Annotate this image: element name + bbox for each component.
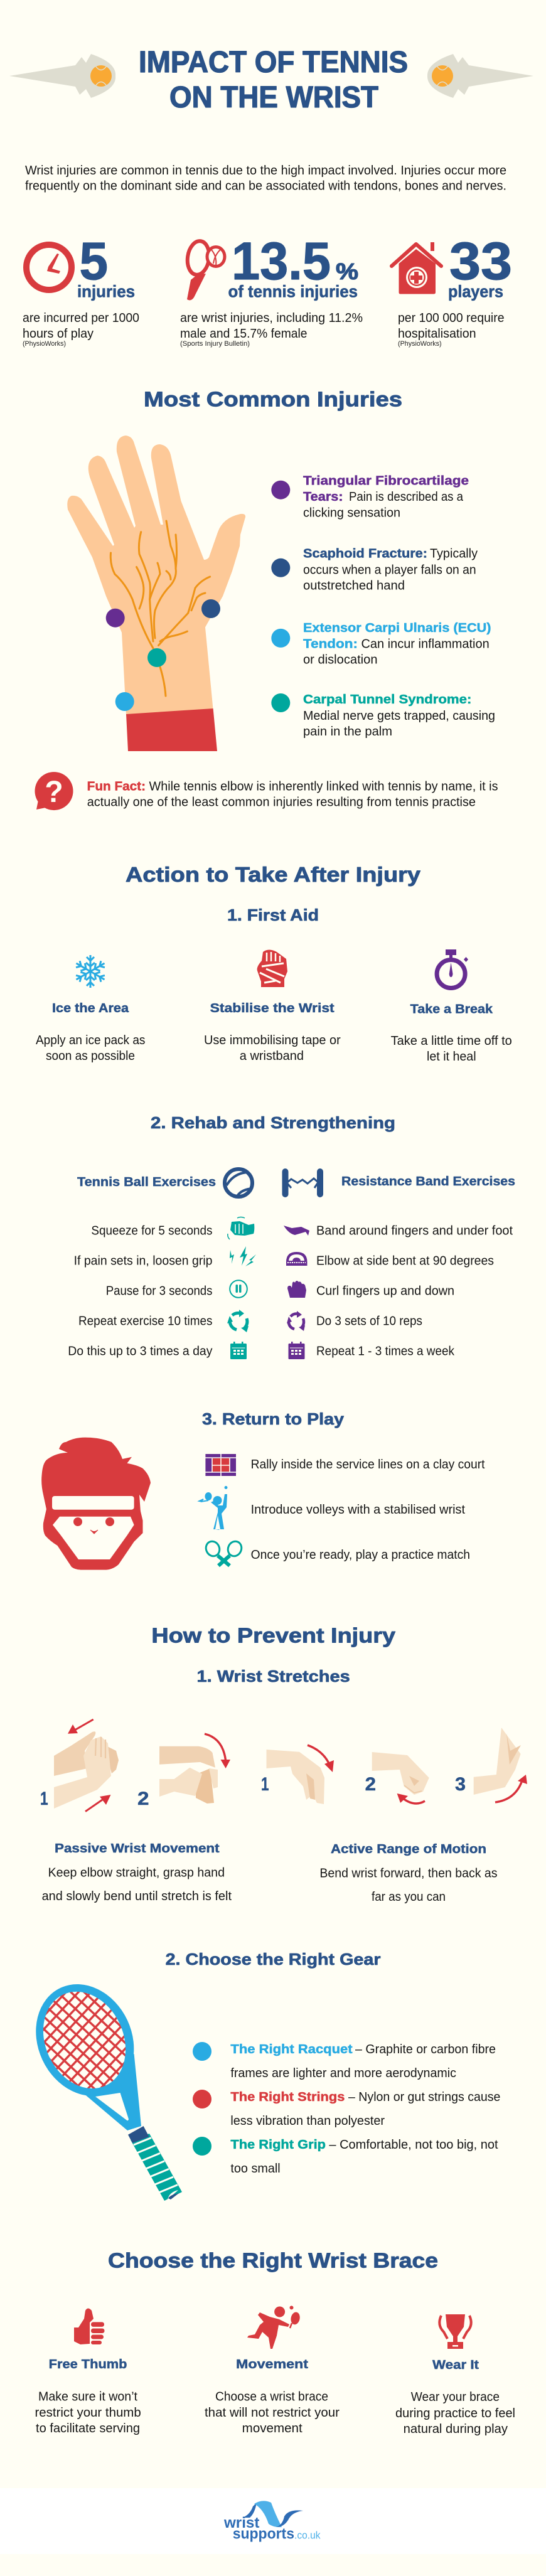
stat: 13.5% of tennis injuries: are wrist injuries, including 11.2% (180, 311, 363, 325)
icon: question bubble (35, 772, 73, 810)
subheading: Rehab and Strengthening: 2. Rehab and Strengthening (151, 1113, 395, 1132)
first aid: ice the area: soon as possible (46, 1049, 135, 1063)
legend: Triangular Fibrocartilage Tears (271, 474, 469, 520)
header row (282, 1168, 515, 1197)
number 3: 3 (455, 1774, 466, 1795)
legend: ECU Tendon: or dislocation (303, 653, 378, 666)
icon: serving player (200, 1486, 227, 1530)
stat: 5 injuries (23, 232, 139, 348)
first aid: take a break: Take a little time off to (391, 1034, 512, 1048)
gear item: racquet: – Graphite or carbon fibre (355, 2043, 496, 2056)
title: IMPACT OF TENNIS (139, 46, 408, 79)
stat: 33 players: hospitalisation (398, 327, 476, 341)
exercise row 5 (289, 1342, 455, 1359)
footer logo: wrist supports (223, 2501, 321, 2543)
subheading: Wrist Stretches: 1. Wrist Stretches (197, 1667, 350, 1686)
callout: fun fact (35, 772, 498, 810)
panel: key statistics (23, 232, 512, 348)
gear item: strings: less vibration than polyester (230, 2114, 385, 2128)
stat: 5 injuries: injuries (77, 282, 135, 301)
step 2 hands (159, 1746, 218, 1804)
heading: Choose the Right Wrist Brace: Choose the Right Wrist Brace (108, 2249, 438, 2272)
stat: 5 injuries: 5 (79, 232, 108, 291)
icon: lightning bolts (230, 1246, 256, 1266)
legend: ECU Tendon: Tendon: (303, 638, 358, 651)
text: Active Range of Motion: far as you can (372, 1890, 446, 1904)
callout: fun fact: Fun Fact: (87, 780, 146, 794)
nerves (110, 521, 210, 696)
brace tip: free thumb: Make sure it won’t (38, 2390, 137, 2403)
first aid: ice the area: Apply an ice pack as (36, 1034, 145, 1047)
icon: foot and band (284, 1226, 309, 1236)
exercise row 1 (91, 1217, 254, 1239)
footer logo: wrist supports: supports (233, 2526, 294, 2543)
brace tip: movement: Movement (236, 2358, 308, 2371)
subheading: First Aid: 1. First Aid (227, 906, 319, 924)
brace tip: movement: that will not restrict your (205, 2406, 340, 2420)
gear item: grip: – Comfortable, not too big, not (329, 2138, 498, 2152)
text: Passive Wrist Movement: Keep elbow straight, grasp hand (48, 1866, 225, 1880)
icon: stopwatch (437, 949, 468, 988)
icon: thumbs up (74, 2308, 104, 2344)
icon: squeezing fist (228, 1217, 254, 1239)
first aid: stabilise the wrist: Use immobilising tape or (204, 1034, 341, 1047)
icon: tennis ball (225, 1169, 252, 1197)
legend: Carpal Tunnel Syndrome: Carpal Tunnel Syndrome: (303, 693, 471, 707)
exercise row 4 (78, 1310, 249, 1332)
gear item: racquet (193, 2042, 496, 2080)
text: Passive Wrist Movement: Passive Wrist Movement (55, 1842, 220, 1856)
legend: ECU Tendon: Can incur inflammation (361, 638, 490, 651)
exercise row 3 (106, 1280, 247, 1298)
grip (128, 2126, 182, 2201)
injury marker: blue (115, 692, 134, 711)
header row: Tennis Ball Exercises (77, 1175, 216, 1189)
illustration: passive wrist movement (40, 1719, 230, 1812)
legend: Scaphoid Fracture: Typically (430, 547, 478, 561)
first aid: stabilise the wrist (204, 950, 341, 1063)
hand (67, 436, 245, 715)
first aid: take a break: let it heal (427, 1050, 476, 1064)
legend: Carpal Tunnel Syndrome (271, 693, 495, 739)
legend: Carpal Tunnel Syndrome: pain in the palm (303, 725, 392, 739)
brace tip: free thumb: Free Thumb (49, 2358, 127, 2371)
stat: 13.5% of tennis injuries: male and 15.7% female (180, 327, 308, 341)
item: volleys: Introduce volleys with a stabilised wrist (251, 1503, 465, 1517)
illustration: racket (18, 1968, 182, 2201)
panel: tennis ball exercises (68, 1169, 256, 1359)
stat: 5 injuries: (PhysioWorks) (23, 340, 66, 348)
icon: hand (287, 1281, 306, 1298)
icon: snowflake (74, 955, 107, 988)
text: Active Range of Motion: Active Range of Motion (331, 1842, 486, 1856)
title: ON THE WRIST (169, 81, 378, 114)
arrow (205, 1734, 230, 1768)
brace tip: wear it: Wear It (432, 2358, 479, 2372)
first aid: ice the area: Ice the Area (52, 1002, 129, 1015)
stat: 13.5% of tennis injuries: (Sports Injury Bulletin) (180, 340, 250, 348)
exercise row 5 (68, 1342, 247, 1359)
brace tip: movement (205, 2306, 340, 2435)
exercise row 5: Do this up to 3 times a day (68, 1345, 212, 1359)
first aid: stabilise the wrist: a wristband (240, 1049, 304, 1063)
gear item: grip (193, 2137, 498, 2176)
stat: 13.5% of tennis injuries: % (336, 259, 358, 284)
header: title and comets (9, 46, 533, 114)
first aid: stabilise the wrist: Stabilise the Wrist (210, 1002, 335, 1015)
brace tip: wear it: natural during play (404, 2422, 508, 2436)
number 1: 1 (40, 1788, 48, 1809)
first aid: take a break: Take a Break (410, 1003, 493, 1017)
icon: hospital house (392, 242, 441, 294)
step 2 hand (372, 1752, 429, 1795)
gear item: strings: The Right Strings (230, 2090, 345, 2104)
intro text (25, 164, 506, 193)
icon: clock (26, 245, 72, 290)
heading: Action to Take After Injury: Action to Take After Injury (126, 863, 421, 886)
gear item: racquet: frames are lighter and more aerodynamic (230, 2066, 456, 2080)
first aid: take a break (391, 949, 512, 1064)
text: Passive Wrist Movement: and slowly bend until stretch is felt (42, 1889, 232, 1903)
exercise row 4: Do 3 sets of 10 reps (316, 1315, 422, 1328)
header row (77, 1169, 252, 1197)
exercise row 4: Repeat exercise 10 times (78, 1315, 212, 1328)
sleeve (126, 708, 217, 751)
injury marker: navy (201, 599, 220, 618)
legend: Scaphoid Fracture: occurs when a player falls on an (303, 564, 476, 577)
exercise row 2 (74, 1246, 256, 1268)
item: volleys (200, 1486, 465, 1530)
subheading: Choose the Right Gear: 2. Choose the Right Gear (166, 1950, 380, 1969)
icon: question bubble: ? (45, 776, 63, 809)
callout: fun fact: actually one of the least common injuries resulting from tennis practise (87, 796, 476, 810)
legend: Carpal Tunnel Syndrome: Medial nerve gets trapped, causing (303, 709, 495, 723)
number 2: 2 (137, 1788, 149, 1809)
brace tip: free thumb: restrict your thumb (35, 2406, 141, 2420)
header row: Resistance Band Exercises (341, 1175, 515, 1189)
icon: calendar (289, 1342, 305, 1359)
legend: Triangular Fibrocartilage Tears: Pain is described as a (349, 490, 464, 504)
arrow (495, 1775, 527, 1802)
text: Passive Wrist Movement (42, 1842, 232, 1903)
icon: racket and ball (185, 240, 225, 300)
gear item: racquet: The Right Racquet (230, 2043, 353, 2056)
legend: Triangular Fibrocartilage Tears: Tears: (303, 490, 343, 504)
arrow (85, 1795, 110, 1812)
icon: tennis player (247, 2306, 301, 2349)
icon: pause (230, 1280, 247, 1298)
stat: 13.5% of tennis injuries: 13.5 (232, 232, 331, 291)
gear item: strings (193, 2090, 500, 2128)
panel: resistance band exercises (282, 1168, 515, 1359)
exercise row 4 (287, 1311, 422, 1331)
intro text: Wrist injuries are common in tennis due to the high impact involved. Injuries occur more (25, 164, 506, 178)
number 2: 2 (365, 1774, 376, 1795)
item: practice match (203, 1539, 470, 1566)
subheading: Return to Play: 3. Return to Play (202, 1409, 345, 1428)
legend: ECU Tendon (271, 621, 491, 666)
callout: fun fact: While tennis elbow is inherently linked with tennis by name, it is (149, 780, 498, 794)
panel: hand diagram (67, 436, 245, 751)
legend: Scaphoid Fracture: Scaphoid Fracture: (303, 547, 427, 561)
arrow (68, 1719, 94, 1734)
gear item: grip: The Right Grip (230, 2138, 326, 2152)
step 1 hands (54, 1731, 119, 1809)
heading: Most Common Injuries: Most Common Injuries (144, 388, 402, 411)
frame (18, 1968, 152, 2112)
exercise row 3: Pause for 3 seconds (106, 1285, 212, 1298)
item: rally: Rally inside the service lines on a clay court (251, 1458, 485, 1472)
footer logo: wrist supports: .co.uk (294, 2530, 321, 2541)
icon: repeat arrows (287, 1311, 305, 1331)
stat: 13.5% of tennis injuries (180, 232, 363, 348)
intro text: frequently on the dominant side and can be associated with tendons, bones and nerves. (25, 179, 506, 193)
brace tip: movement: Choose a wrist brace (215, 2390, 328, 2403)
icon: calendar (230, 1342, 247, 1359)
item: rally (205, 1454, 485, 1476)
exercise row 2: If pain sets in, loosen grip (74, 1254, 212, 1268)
exercise row 5: Repeat 1 - 3 times a week (316, 1345, 455, 1359)
stat: 5 injuries: are incurred per 1000 (23, 311, 139, 325)
exercise row 3 (287, 1281, 454, 1298)
legend: Scaphoid Fracture (271, 547, 478, 593)
icon: repeat arrows (227, 1310, 249, 1332)
step 1 hand (266, 1750, 324, 1804)
text: Active Range of Motion (319, 1842, 497, 1904)
icon: crossed rackets (203, 1539, 244, 1566)
exercise row 1: Band around fingers and under foot (316, 1224, 513, 1238)
brace tip: free thumb: to facilitate serving (36, 2422, 140, 2435)
legend: ECU Tendon: Extensor Carpi Ulnaris (ECU) (303, 621, 491, 635)
gear item: grip: too small (230, 2162, 281, 2176)
icon: player head with headband (41, 1438, 151, 1570)
footer logo: wrist supports: wrist (223, 2515, 259, 2531)
stat: 13.5% of tennis injuries: of tennis injuries (228, 282, 358, 301)
brace tip: wear it (395, 2314, 515, 2436)
stat: 5 injuries: hours of play (23, 327, 94, 341)
stat: 33 players: (PhysioWorks) (398, 340, 442, 348)
icon: right tennis ball comet (427, 54, 533, 98)
number 1: 1 (261, 1774, 269, 1795)
brace tip: wear it: Wear your brace (411, 2390, 500, 2404)
text: Active Range of Motion: Bend wrist forward, then back as (319, 1867, 497, 1881)
icon: bandaged hand (257, 950, 287, 987)
stat: 33 players (392, 232, 512, 348)
brace tip: wear it: during practice to feel (395, 2407, 515, 2420)
legend: Triangular Fibrocartilage Tears: clicking sensation (303, 506, 400, 520)
stat: 33 players: 33 (449, 232, 512, 291)
exercise row 3: Curl fingers up and down (316, 1285, 454, 1298)
stat: 33 players: players (448, 282, 503, 301)
illustration: active range of motion (261, 1728, 527, 1804)
throat (63, 2054, 141, 2130)
first aid: ice the area (36, 955, 145, 1063)
legend: Triangular Fibrocartilage Tears: Triangular Fibrocartilage (303, 474, 469, 488)
icon: left tennis ball comet (9, 54, 115, 98)
step 3 hand (474, 1728, 521, 1795)
brace tip: free thumb (35, 2308, 141, 2435)
arrow (308, 1745, 334, 1772)
gear item: strings: – Nylon or gut strings cause (348, 2090, 500, 2104)
icon: protractor (286, 1252, 308, 1266)
swoosh (242, 2501, 303, 2527)
icon: court (205, 1454, 236, 1476)
stat: 33 players: per 100 000 require (398, 311, 505, 325)
brace tip: movement: movement (242, 2422, 302, 2435)
legend: Scaphoid Fracture: outstretched hand (303, 579, 405, 593)
strings (28, 1978, 141, 2102)
arrow (397, 1793, 425, 1804)
title (139, 46, 408, 114)
injury marker: purple (106, 609, 125, 628)
exercise row 2: Elbow at side bent at 90 degrees (316, 1254, 494, 1268)
injury marker: teal (147, 648, 166, 667)
exercise row 1: Squeeze for 5 seconds (91, 1224, 212, 1238)
icon: trophy (439, 2314, 471, 2349)
heading: How to Prevent Injury: How to Prevent Injury (151, 1624, 396, 1647)
icon: resistance band (282, 1168, 323, 1197)
item: practice match: Once you’re ready, play a practice match (251, 1548, 470, 1562)
